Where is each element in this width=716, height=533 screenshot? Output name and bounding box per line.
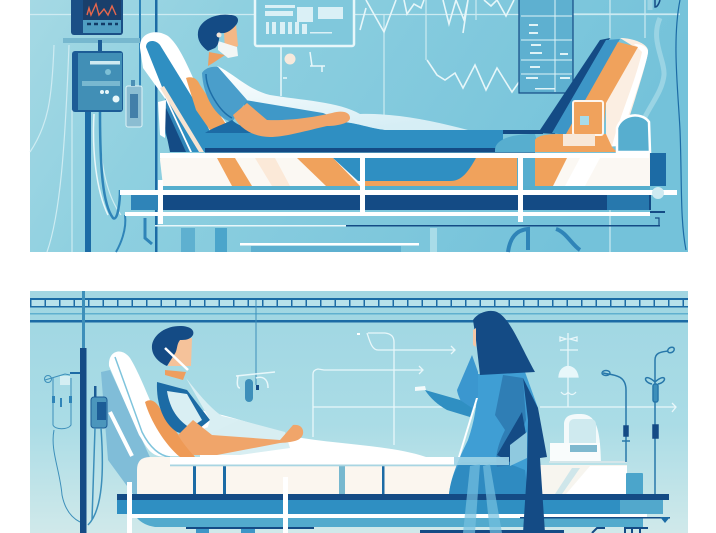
bedside device white	[549, 414, 627, 463]
patient blue torso cover	[240, 100, 345, 130]
nurse: upper body in blue gown	[415, 355, 538, 495]
patient blanket	[217, 66, 468, 130]
device: small syringe pump	[126, 80, 142, 127]
bed: wheel stand	[508, 229, 580, 252]
nurse face sliver	[473, 328, 476, 347]
panel: ICU patient with monitors	[30, 0, 688, 252]
nurse hand	[415, 386, 426, 391]
patient hair	[198, 15, 238, 51]
wall grid lines	[30, 0, 680, 252]
IV stand left with tubing	[44, 373, 80, 522]
nurse fold	[495, 375, 526, 467]
chart: waveform lower	[427, 60, 537, 92]
patient neck	[165, 370, 186, 380]
IV stand right near	[602, 370, 630, 462]
patient: resting figure with breathing strap	[152, 326, 426, 457]
patient arm and hand	[233, 103, 350, 137]
main IV pole	[80, 291, 86, 533]
wall monitor: vitals display	[255, 0, 354, 46]
bed: right rail clamp	[650, 187, 665, 225]
wall coat hook	[559, 333, 578, 407]
monitor: infusion pump	[72, 51, 123, 112]
bed: right white panel	[540, 465, 643, 495]
nurse skirt highlights	[458, 398, 478, 457]
patient face	[224, 24, 238, 52]
panel background	[30, 0, 688, 252]
bed: mattress and blue cover	[205, 122, 543, 152]
wall diagram lines with arrows	[313, 333, 676, 445]
IV pole left	[63, 0, 158, 252]
patient blanket	[200, 410, 426, 457]
patient strap	[165, 348, 188, 370]
nurse raised sleeve	[457, 355, 478, 417]
bed: white frame with stripes	[160, 153, 666, 190]
patient hair	[152, 326, 193, 366]
bedside infusion pump	[88, 386, 107, 525]
nurse long hair tail	[523, 378, 547, 533]
bed: back rest on left	[140, 32, 238, 152]
top side rail	[160, 153, 649, 158]
nurse gown	[449, 372, 538, 495]
nurse: hair and translucent legs	[463, 311, 547, 533]
data panel: wall chart	[519, 0, 573, 93]
ceiling rail	[30, 291, 688, 322]
patient mask	[218, 41, 238, 58]
patient: lying figure with mask	[198, 15, 468, 137]
nurse legs	[463, 464, 480, 533]
right edge cable	[676, 0, 686, 250]
panel: patient with nurse	[30, 291, 688, 533]
bed: base frame	[117, 477, 670, 533]
bed: white mattress and rail	[137, 457, 510, 495]
wall gas outlet	[281, 46, 325, 96]
patient vest	[157, 382, 210, 436]
patient arm and hand	[178, 420, 303, 455]
patient torso and shirt	[202, 67, 247, 122]
bed: foot board on right	[535, 38, 648, 152]
chart: waveform upper	[360, 0, 514, 33]
nurse outstretched arm	[425, 390, 472, 417]
patient neck	[208, 52, 225, 66]
bed: base frame	[120, 158, 677, 252]
bed: back rest	[101, 351, 195, 497]
patient face	[168, 338, 192, 366]
IV stand right far	[646, 346, 675, 495]
patient shirt	[167, 391, 202, 428]
hanging drip center	[236, 300, 275, 402]
bed: footboard rail with blue pad	[617, 115, 650, 152]
panel background	[30, 291, 688, 533]
decorative hanging tube right	[640, 0, 664, 130]
monitor: top vitals screen	[71, 0, 123, 35]
nurse hair	[473, 311, 535, 375]
